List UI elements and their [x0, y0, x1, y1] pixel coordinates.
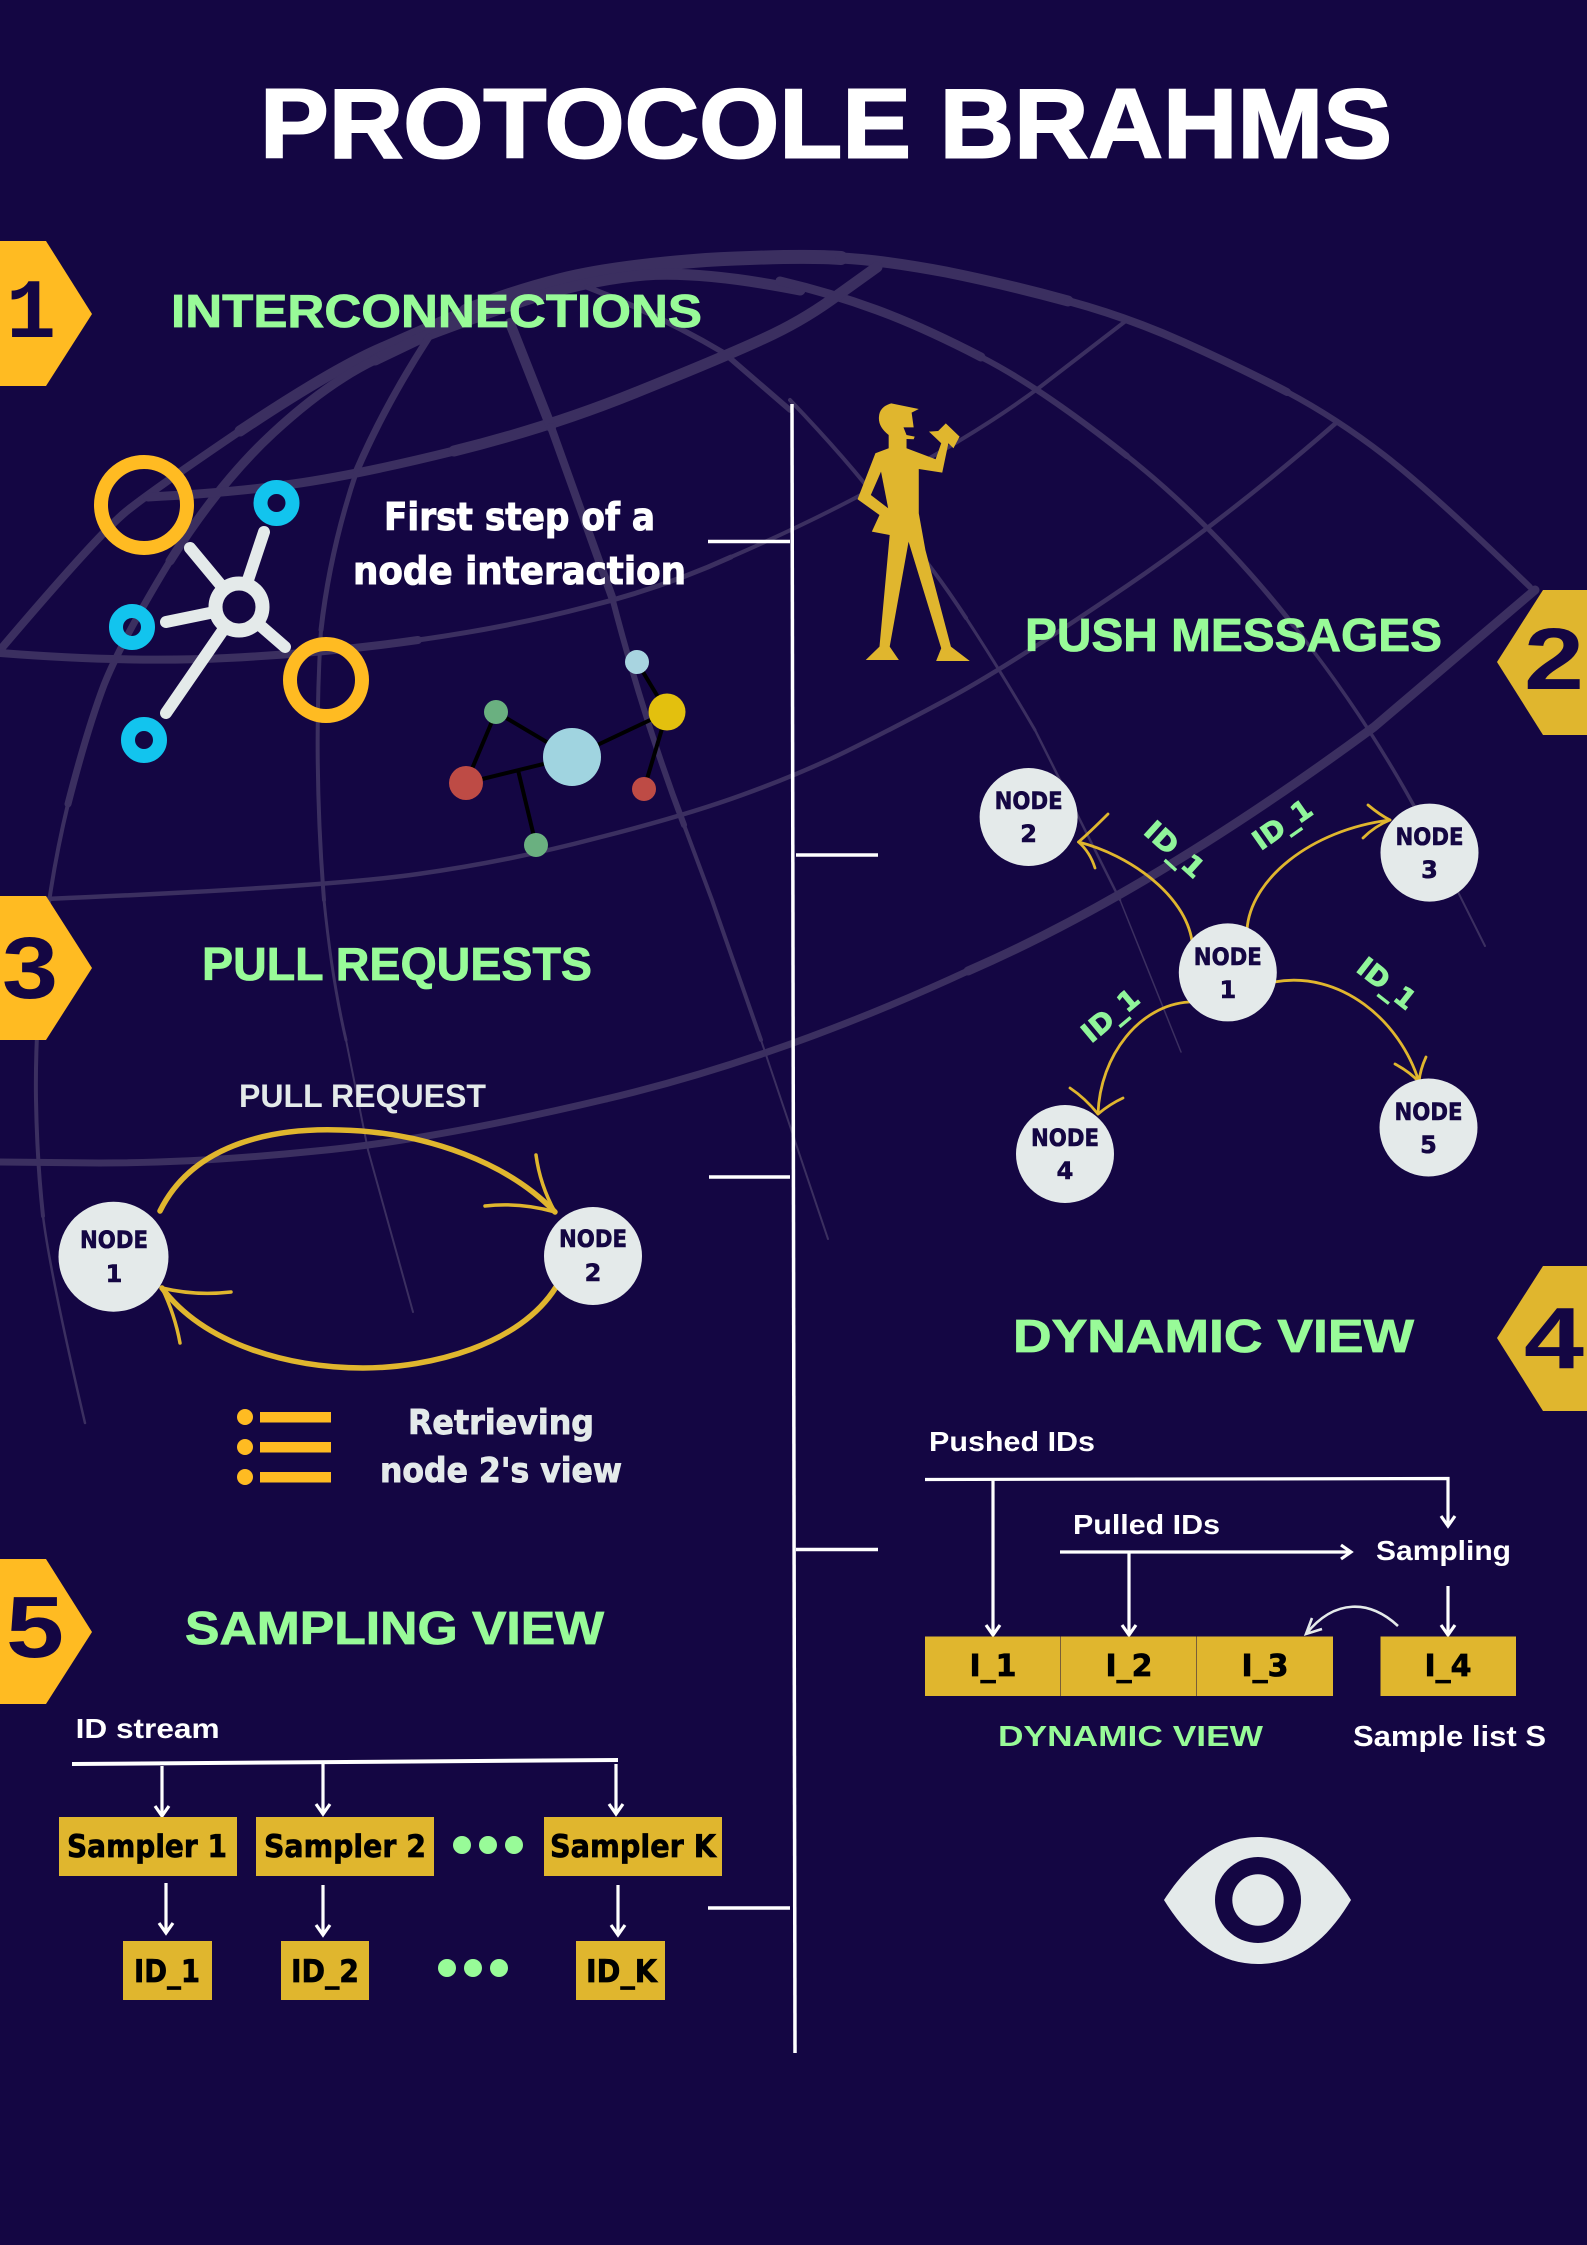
node 5: NODE: [1394, 1098, 1462, 1126]
view boxes: I_3: [1241, 1649, 1289, 1684]
step badge 3: [0, 896, 92, 1040]
step badge 5: [0, 1559, 92, 1704]
node 1: [1179, 923, 1277, 1021]
id boxes: [123, 1941, 665, 2000]
node 1: 1: [1219, 976, 1236, 1004]
step badge 3: 3: [2, 920, 58, 1017]
id boxes: ID_K: [586, 1954, 658, 1990]
label: pull request: PULL REQUEST: [239, 1078, 486, 1114]
labels: pushed, pulled, sampling: Pulled IDs: [1073, 1509, 1220, 1540]
node 2: NODE: [559, 1225, 627, 1253]
sampler boxes: Sampler K: [550, 1829, 717, 1865]
arrow labels: ID_1: [1138, 815, 1210, 885]
text: retrieving view: Retrieving: [408, 1403, 594, 1443]
id boxes: ID_1: [134, 1954, 200, 1990]
step badge 4: 4: [1524, 1290, 1584, 1387]
panel: interconnections: [0, 241, 702, 857]
arrow labels: ID_1: [1247, 794, 1319, 857]
node 2: [544, 1207, 642, 1305]
panel: pull requests: [0, 896, 642, 1491]
view boxes: I_4: [1424, 1649, 1472, 1684]
node 1: [58, 1202, 168, 1312]
step badge 1: 1: [6, 268, 56, 363]
node 2: NODE: [995, 787, 1063, 815]
sampler boxes: Sampler 1: [67, 1829, 227, 1865]
heading: interconnections: INTERCONNECTIONS: [171, 285, 702, 337]
view boxes: I_1: [969, 1649, 1017, 1684]
icon: node graph: [449, 650, 686, 857]
icon: eye: [1164, 1837, 1351, 1964]
text: first step: node interaction: [353, 549, 686, 593]
icon: person silhouette: [858, 403, 970, 661]
node 4: [1016, 1105, 1114, 1203]
node 3: 3: [1421, 856, 1438, 884]
icon: list: [237, 1409, 331, 1485]
node 4: NODE: [1031, 1124, 1099, 1152]
node 1: 1: [106, 1260, 122, 1288]
arrow labels: ID_1: [1076, 983, 1146, 1049]
labels: pushed, pulled, sampling: Pushed IDs: [929, 1426, 1095, 1457]
globe background: [0, 257, 1535, 1423]
label: sample list: Sample list S: [1353, 1721, 1546, 1753]
step badge 1: [0, 241, 92, 386]
node 1: NODE: [1194, 943, 1262, 971]
node 1: NODE: [80, 1226, 148, 1254]
id boxes: ID_2: [291, 1954, 359, 1990]
view boxes: I_2: [1105, 1649, 1153, 1684]
flow arrows: [925, 1478, 1455, 1635]
heading: push messages: PUSH MESSAGES: [1025, 609, 1442, 661]
flow arrows: [72, 1760, 625, 1935]
dots: [438, 1959, 508, 1977]
text: first step: First step of a: [384, 495, 655, 539]
step badge 2: [1497, 590, 1587, 735]
text: retrieving view: node 2's view: [380, 1451, 622, 1491]
node 3: [1380, 804, 1478, 902]
step badge 5: 5: [6, 1579, 64, 1676]
view boxes: [925, 1636, 1516, 1696]
icon: network with rings: [101, 462, 362, 756]
sampler boxes: [59, 1817, 722, 1876]
step badge 4: [1497, 1266, 1587, 1411]
panel: push messages: [980, 590, 1587, 1203]
arrows: node 1 to others: [1070, 805, 1426, 1114]
node 5: [1380, 1078, 1478, 1176]
heading: sampling view: SAMPLING VIEW: [185, 1602, 605, 1654]
sampler boxes: Sampler 2: [264, 1829, 426, 1865]
heading: pull requests: PULL REQUESTS: [202, 938, 592, 990]
panel: sampling view: [0, 1559, 722, 2000]
node 2: [980, 768, 1078, 866]
arrows: request and response: [160, 1130, 556, 1368]
node 3: NODE: [1396, 823, 1464, 851]
arrow labels: ID_1: [1351, 952, 1422, 1017]
label: dynamic view: DYNAMIC VIEW: [998, 1721, 1264, 1753]
title: PROTOCOLE BRAHMS: [260, 68, 1392, 178]
text: retrieving view: [380, 1403, 622, 1491]
text: first step: [353, 495, 686, 593]
panel: dynamic view: [925, 1266, 1587, 1964]
node 4: 4: [1057, 1157, 1073, 1185]
node 5: 5: [1420, 1131, 1437, 1159]
node 2: 2: [1020, 820, 1037, 848]
step badge 2: 2: [1524, 611, 1584, 708]
heading: dynamic view: DYNAMIC VIEW: [1013, 1310, 1415, 1362]
labels: pushed, pulled, sampling: [929, 1426, 1511, 1566]
timeline: [708, 404, 878, 2053]
label: id stream: ID stream: [76, 1713, 220, 1744]
arrow labels: [1076, 794, 1422, 1049]
node 2: 2: [585, 1259, 601, 1287]
labels: pushed, pulled, sampling: Sampling: [1376, 1535, 1511, 1566]
dots: [453, 1836, 523, 1854]
